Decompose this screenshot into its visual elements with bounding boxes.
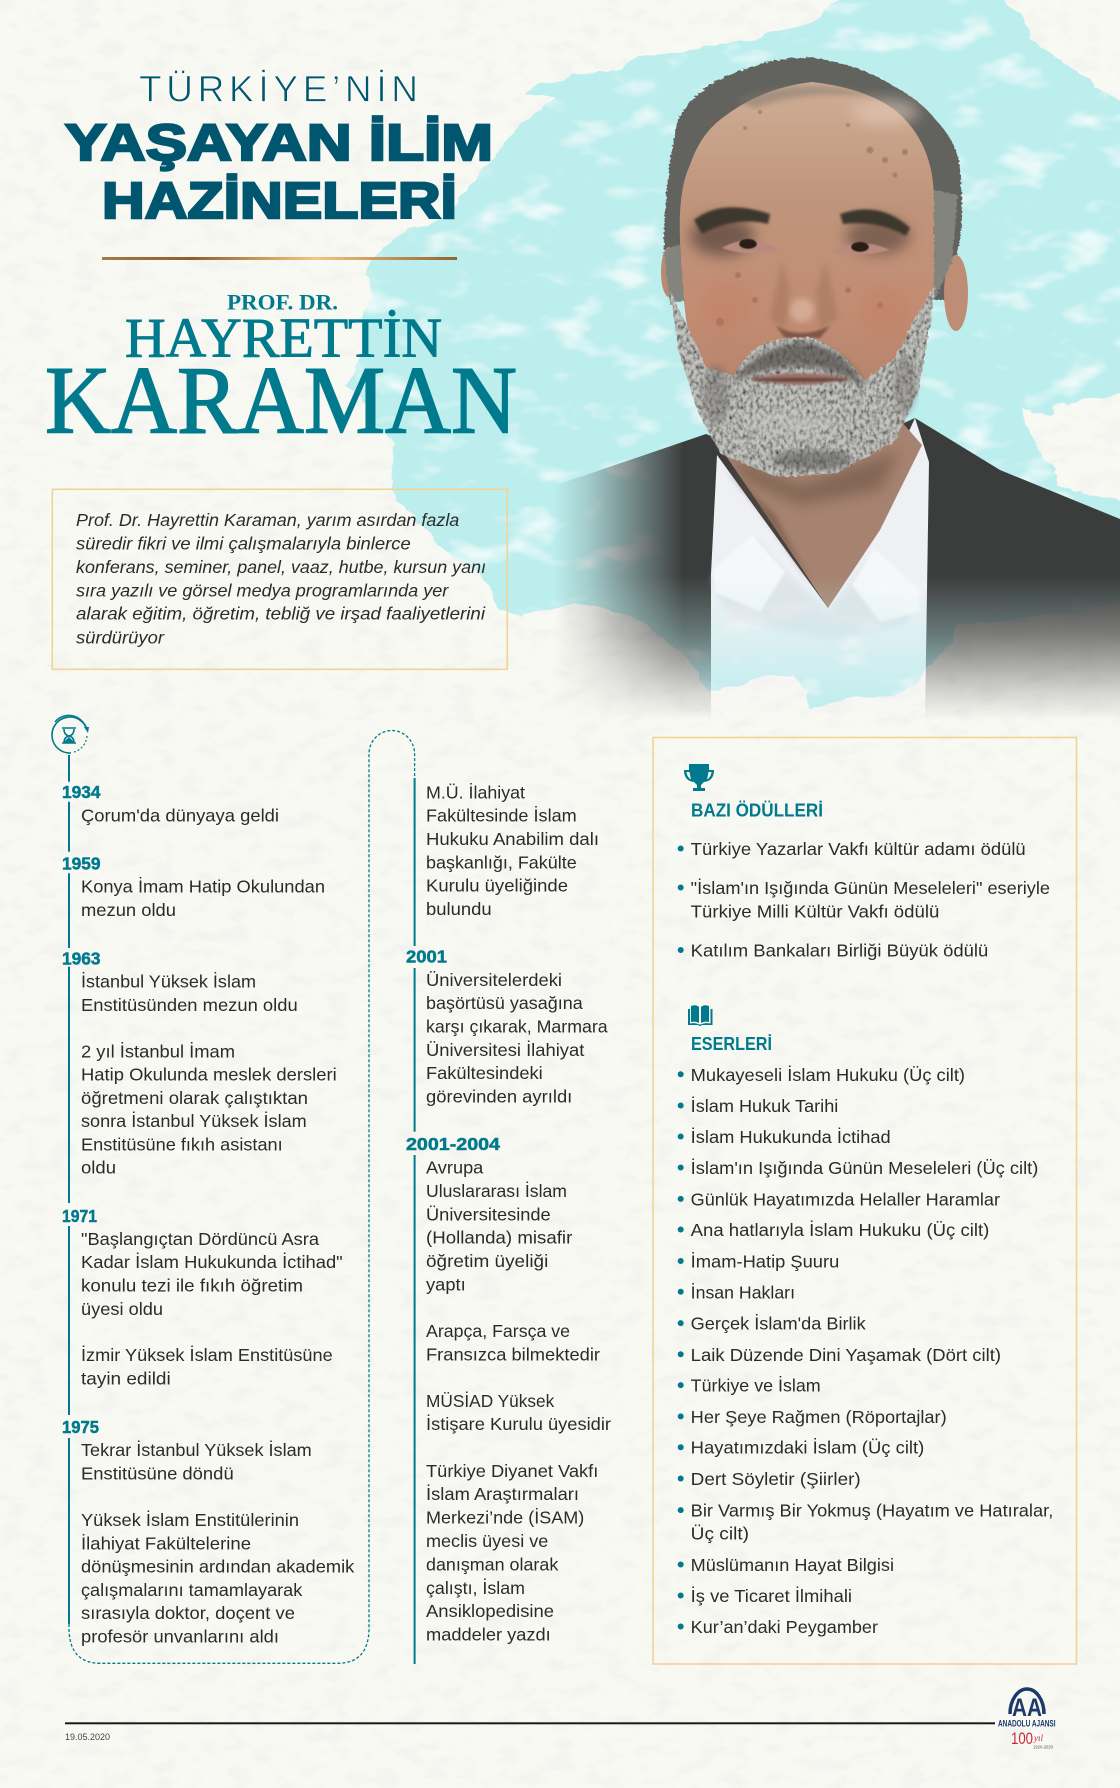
works list: Türkiye ve İslam	[691, 1376, 821, 1396]
1975 entry: 1975	[62, 1417, 99, 1437]
heading: Eserleri: ESERLERİ	[691, 1034, 772, 1054]
M.Ü. entry: Hukuku Anabilim dalı	[426, 829, 599, 849]
name: Prof. Dr. Hayrettin Karaman: KARAMAN	[45, 347, 517, 454]
name: Prof. Dr. Hayrettin Karaman: HAYRETTİN	[125, 308, 442, 370]
1963 entry: öğretmeni olarak çalıştıktan	[81, 1088, 308, 1108]
2001-2004 entry: maddeler yazdı	[426, 1625, 551, 1645]
1975 entry: Tekrar İstanbul Yüksek İslam	[81, 1440, 312, 1460]
1975 entry	[62, 1417, 355, 1646]
icon: trophy	[684, 764, 714, 791]
date: 19.05.2020	[65, 1732, 110, 1742]
timeline column 1	[62, 782, 355, 1646]
1963 entry: 1963	[62, 948, 101, 968]
1963 entry: Hatip Okulunda meslek dersleri	[81, 1065, 337, 1085]
1963 entry: 2 yıl İstanbul İmam	[81, 1041, 235, 1061]
2001-2004 entry: Arapça, Farsça ve	[426, 1321, 570, 1341]
2001 entry: Üniversitelerdeki	[426, 970, 562, 990]
beard highlight and shade	[702, 355, 917, 470]
M.Ü. entry: Kurulu üyeliğinde	[426, 876, 568, 896]
works list: Ana hatlarıyla İslam Hukuku (Üç cilt)	[691, 1220, 989, 1240]
works list: İslam Hukukunda İctihad	[691, 1127, 891, 1147]
1971 entry: "Başlangıçtan Dördüncü Asra	[81, 1229, 319, 1249]
gold divider	[102, 257, 457, 260]
2001-2004 entry: danışman olarak	[426, 1554, 559, 1574]
1971 entry	[62, 1206, 343, 1389]
logo: Anadolu Ajansı 100 yıl: ANADOLU AJANSI	[998, 1719, 1056, 1730]
freckles	[709, 106, 908, 326]
works list: Gerçek İslam'da Birlik	[691, 1314, 866, 1334]
1971 entry: konulu tezi ile fıkıh öğretim	[81, 1276, 303, 1296]
works list: İş ve Ticaret İlmihali	[691, 1586, 852, 1606]
beard	[670, 285, 935, 477]
heading: Türkiye'nin: TÜRKİYE’NİN	[139, 69, 418, 110]
1971 entry: 1971	[62, 1206, 97, 1226]
1975 entry: dönüşmesinin ardından akademik	[81, 1557, 355, 1577]
1934 entry: 1934	[62, 782, 101, 802]
works list: Kur’an’daki Peygamber	[691, 1617, 878, 1637]
1959 entry: 1959	[62, 853, 101, 873]
ears	[661, 247, 968, 331]
2001-2004 entry: öğretim üyeliği	[426, 1251, 548, 1271]
eyebrows	[694, 207, 910, 236]
works list: Laik Düzende Dini Yaşamak (Dört cilt)	[691, 1345, 1001, 1365]
1975 entry: sırasıyla doktor, doçent ve	[81, 1603, 295, 1623]
2001 entry: görevinden ayrıldı	[426, 1087, 572, 1107]
1971 entry: İzmir Yüksek İslam Enstitüsüne	[81, 1345, 333, 1365]
M.Ü. entry: bulundu	[426, 899, 492, 919]
1975 entry: Enstitüsüne döndü	[81, 1464, 234, 1484]
2001 entry: başörtüsü yasağına	[426, 993, 583, 1013]
2001-2004 entry: Türkiye Diyanet Vakfı	[426, 1461, 598, 1481]
shirt	[711, 418, 929, 720]
intro text box: konferans, seminer, panel, vaaz, hutbe, kursun yanı	[76, 557, 486, 577]
face	[680, 82, 935, 381]
1963 entry: Enstitüsünden mezun oldu	[81, 995, 298, 1015]
eyes	[722, 239, 890, 255]
works list: Günlük Hayatımızda Helaller Haramlar	[691, 1189, 1000, 1209]
awards list	[678, 839, 1050, 961]
1963 entry: oldu	[81, 1158, 116, 1178]
2001 entry: karşı çıkarak, Marmara	[426, 1017, 608, 1037]
works list: Üç cilt)	[691, 1524, 749, 1544]
heading: Yaşayan İlim Hazineleri	[65, 114, 493, 229]
neck	[722, 420, 922, 608]
1959 entry: mezun oldu	[81, 900, 176, 920]
2001 entry: 2001	[406, 946, 447, 966]
intro text box: sürdürüyor	[76, 627, 165, 647]
1959 entry: Konya İmam Hatip Okulundan	[81, 877, 325, 897]
works list	[678, 1065, 1053, 1637]
works list: İslam'ın Işığında Günün Meseleleri (Üç cilt)	[691, 1158, 1038, 1178]
name: Prof. Dr. Hayrettin Karaman: PROF. DR.	[227, 290, 338, 314]
2001-2004 entry: Fransızca bilmektedir	[426, 1344, 600, 1364]
timeline column 2	[406, 782, 611, 1645]
heading: Bazı Ödülleri: BAZI ÖDÜLLERİ	[691, 801, 823, 821]
M.Ü. entry	[426, 782, 599, 919]
intro text box	[52, 489, 507, 669]
2001-2004 entry	[406, 1134, 611, 1645]
1971 entry: Kadar İslam Hukukunda İctihad"	[81, 1252, 343, 1272]
M.Ü. entry: başkanlığı, Fakülte	[426, 852, 577, 872]
2001-2004 entry: 2001-2004	[406, 1134, 500, 1154]
hairline shadow	[735, 85, 880, 108]
awards list: Türkiye Milli Kültür Vakfı ödülü	[691, 901, 939, 921]
watercolor backdrop	[350, 0, 1120, 708]
works list: Bir Varmış Bir Yokmuş (Hayatım ve Hatıralar,	[691, 1501, 1053, 1521]
moustache shadow	[733, 342, 866, 388]
works list: İmam-Hatip Şuuru	[691, 1252, 839, 1272]
logo: Anadolu Ajansı 100 yıl: 100	[1011, 1729, 1033, 1748]
1975 entry: Yüksek İslam Enstitülerinin	[81, 1510, 299, 1530]
works list: Mukayeseli İslam Hukuku (Üç cilt)	[691, 1065, 965, 1085]
footer rule	[65, 1722, 995, 1724]
intro text box: sıra yazılı ve görsel medya programlarında yer	[76, 580, 450, 600]
2001 entry: Üniversitesi İlahiyat	[426, 1040, 584, 1060]
name: Prof. Dr. Hayrettin Karaman	[45, 290, 517, 454]
panel: awards and works	[653, 738, 1076, 1664]
jacket	[530, 418, 1120, 720]
2001-2004 entry: Avrupa	[426, 1158, 484, 1178]
heading: Yaşayan İlim Hazineleri: HAZİNELERİ	[102, 172, 457, 229]
2001 entry: Fakültesindeki	[426, 1063, 543, 1083]
logo: Anadolu Ajansı 100 yıl: yıl	[1033, 1733, 1043, 1743]
eye sockets	[690, 216, 910, 256]
intro text box: alarak eğitim, öğretim, tebliğ ve irşad faaliyetlerini	[76, 604, 486, 624]
timeline connector lines	[69, 730, 415, 1664]
2001-2004 entry: çalıştı, İslam	[426, 1578, 525, 1598]
1971 entry: üyesi oldu	[81, 1299, 163, 1319]
2001 entry	[406, 946, 608, 1107]
1963 entry: İstanbul Yüksek İslam	[81, 972, 256, 992]
portrait photo of Hayrettin Karaman	[530, 57, 1120, 720]
2001-2004 entry: Merkezi’nde (İSAM)	[426, 1508, 584, 1528]
1971 entry: tayin edildi	[81, 1369, 171, 1389]
2001-2004 entry: MÜSİAD Yüksek	[426, 1391, 555, 1411]
icon: open book	[688, 1005, 712, 1026]
1975 entry: çalışmalarını tamamlayarak	[81, 1580, 303, 1600]
M.Ü. entry: Fakültesinde İslam	[426, 806, 577, 826]
awards list: Katılım Bankaları Birliği Büyük ödülü	[691, 941, 988, 961]
works list: Hayatımızdaki İslam (Üç cilt)	[691, 1438, 924, 1458]
logo: Anadolu Ajansı 100 yıl: AA	[1012, 1694, 1042, 1722]
2001-2004 entry: Üniversitesinde	[426, 1205, 551, 1225]
works list: İslam Hukuk Tarihi	[691, 1096, 838, 1116]
1963 entry	[62, 948, 337, 1178]
2001-2004 entry: İstişare Kurulu üyesidir	[426, 1414, 611, 1434]
2001-2004 entry: yaptı	[426, 1274, 466, 1294]
side hair	[664, 190, 958, 305]
awards list: Türkiye Yazarlar Vakfı kültür adamı ödülü	[691, 839, 1026, 859]
1934 entry	[62, 782, 279, 826]
works list: İnsan Hakları	[691, 1282, 795, 1302]
M.Ü. entry: M.Ü. İlahiyat	[426, 782, 525, 802]
1975 entry: profesör unvanlarını aldı	[81, 1626, 279, 1646]
2001-2004 entry: meclis üyesi ve	[426, 1531, 548, 1551]
works list: Her Şeye Rağmen (Röportajlar)	[691, 1407, 947, 1427]
heading: Yaşayan İlim Hazineleri: YAŞAYAN İLİM	[65, 114, 493, 171]
nose	[770, 260, 838, 338]
icon: hourglass timer	[52, 715, 89, 753]
1963 entry: Enstitüsüne fıkıh asistanı	[81, 1134, 283, 1154]
1934 entry: Çorum'da dünyaya geldi	[81, 806, 279, 826]
intro text box: Prof. Dr. Hayrettin Karaman, yarım asırdan fazla	[76, 510, 460, 530]
1959 entry	[62, 853, 325, 920]
2001-2004 entry: Uluslararası İslam	[426, 1181, 567, 1201]
2001-2004 entry: (Hollanda) misafir	[426, 1228, 572, 1248]
works list: Müslümanın Hayat Bilgisi	[691, 1555, 894, 1575]
works list: Dert Söyletir (Şiirler)	[691, 1469, 861, 1489]
1975 entry: İlahiyat Fakültelerine	[81, 1533, 251, 1553]
forehead highlight	[851, 99, 919, 125]
mouth	[752, 373, 848, 385]
intro text box: süredir fikri ve ilmi çalışmalarıyla binlerce	[76, 533, 411, 553]
hair	[664, 57, 962, 300]
1963 entry: sonra İstanbul Yüksek İslam	[81, 1111, 307, 1131]
2001-2004 entry: İslam Araştırmaları	[426, 1484, 579, 1504]
logo: Anadolu Ajansı 100 yıl	[998, 1689, 1056, 1750]
2001-2004 entry: Ansiklopedisine	[426, 1601, 554, 1621]
cheeks	[699, 279, 911, 336]
awards list: "İslam'ın Işığında Günün Meseleleri" eseriyle	[691, 878, 1050, 898]
logo: Anadolu Ajansı 100 yıl: 1920-2020	[1033, 1744, 1053, 1750]
